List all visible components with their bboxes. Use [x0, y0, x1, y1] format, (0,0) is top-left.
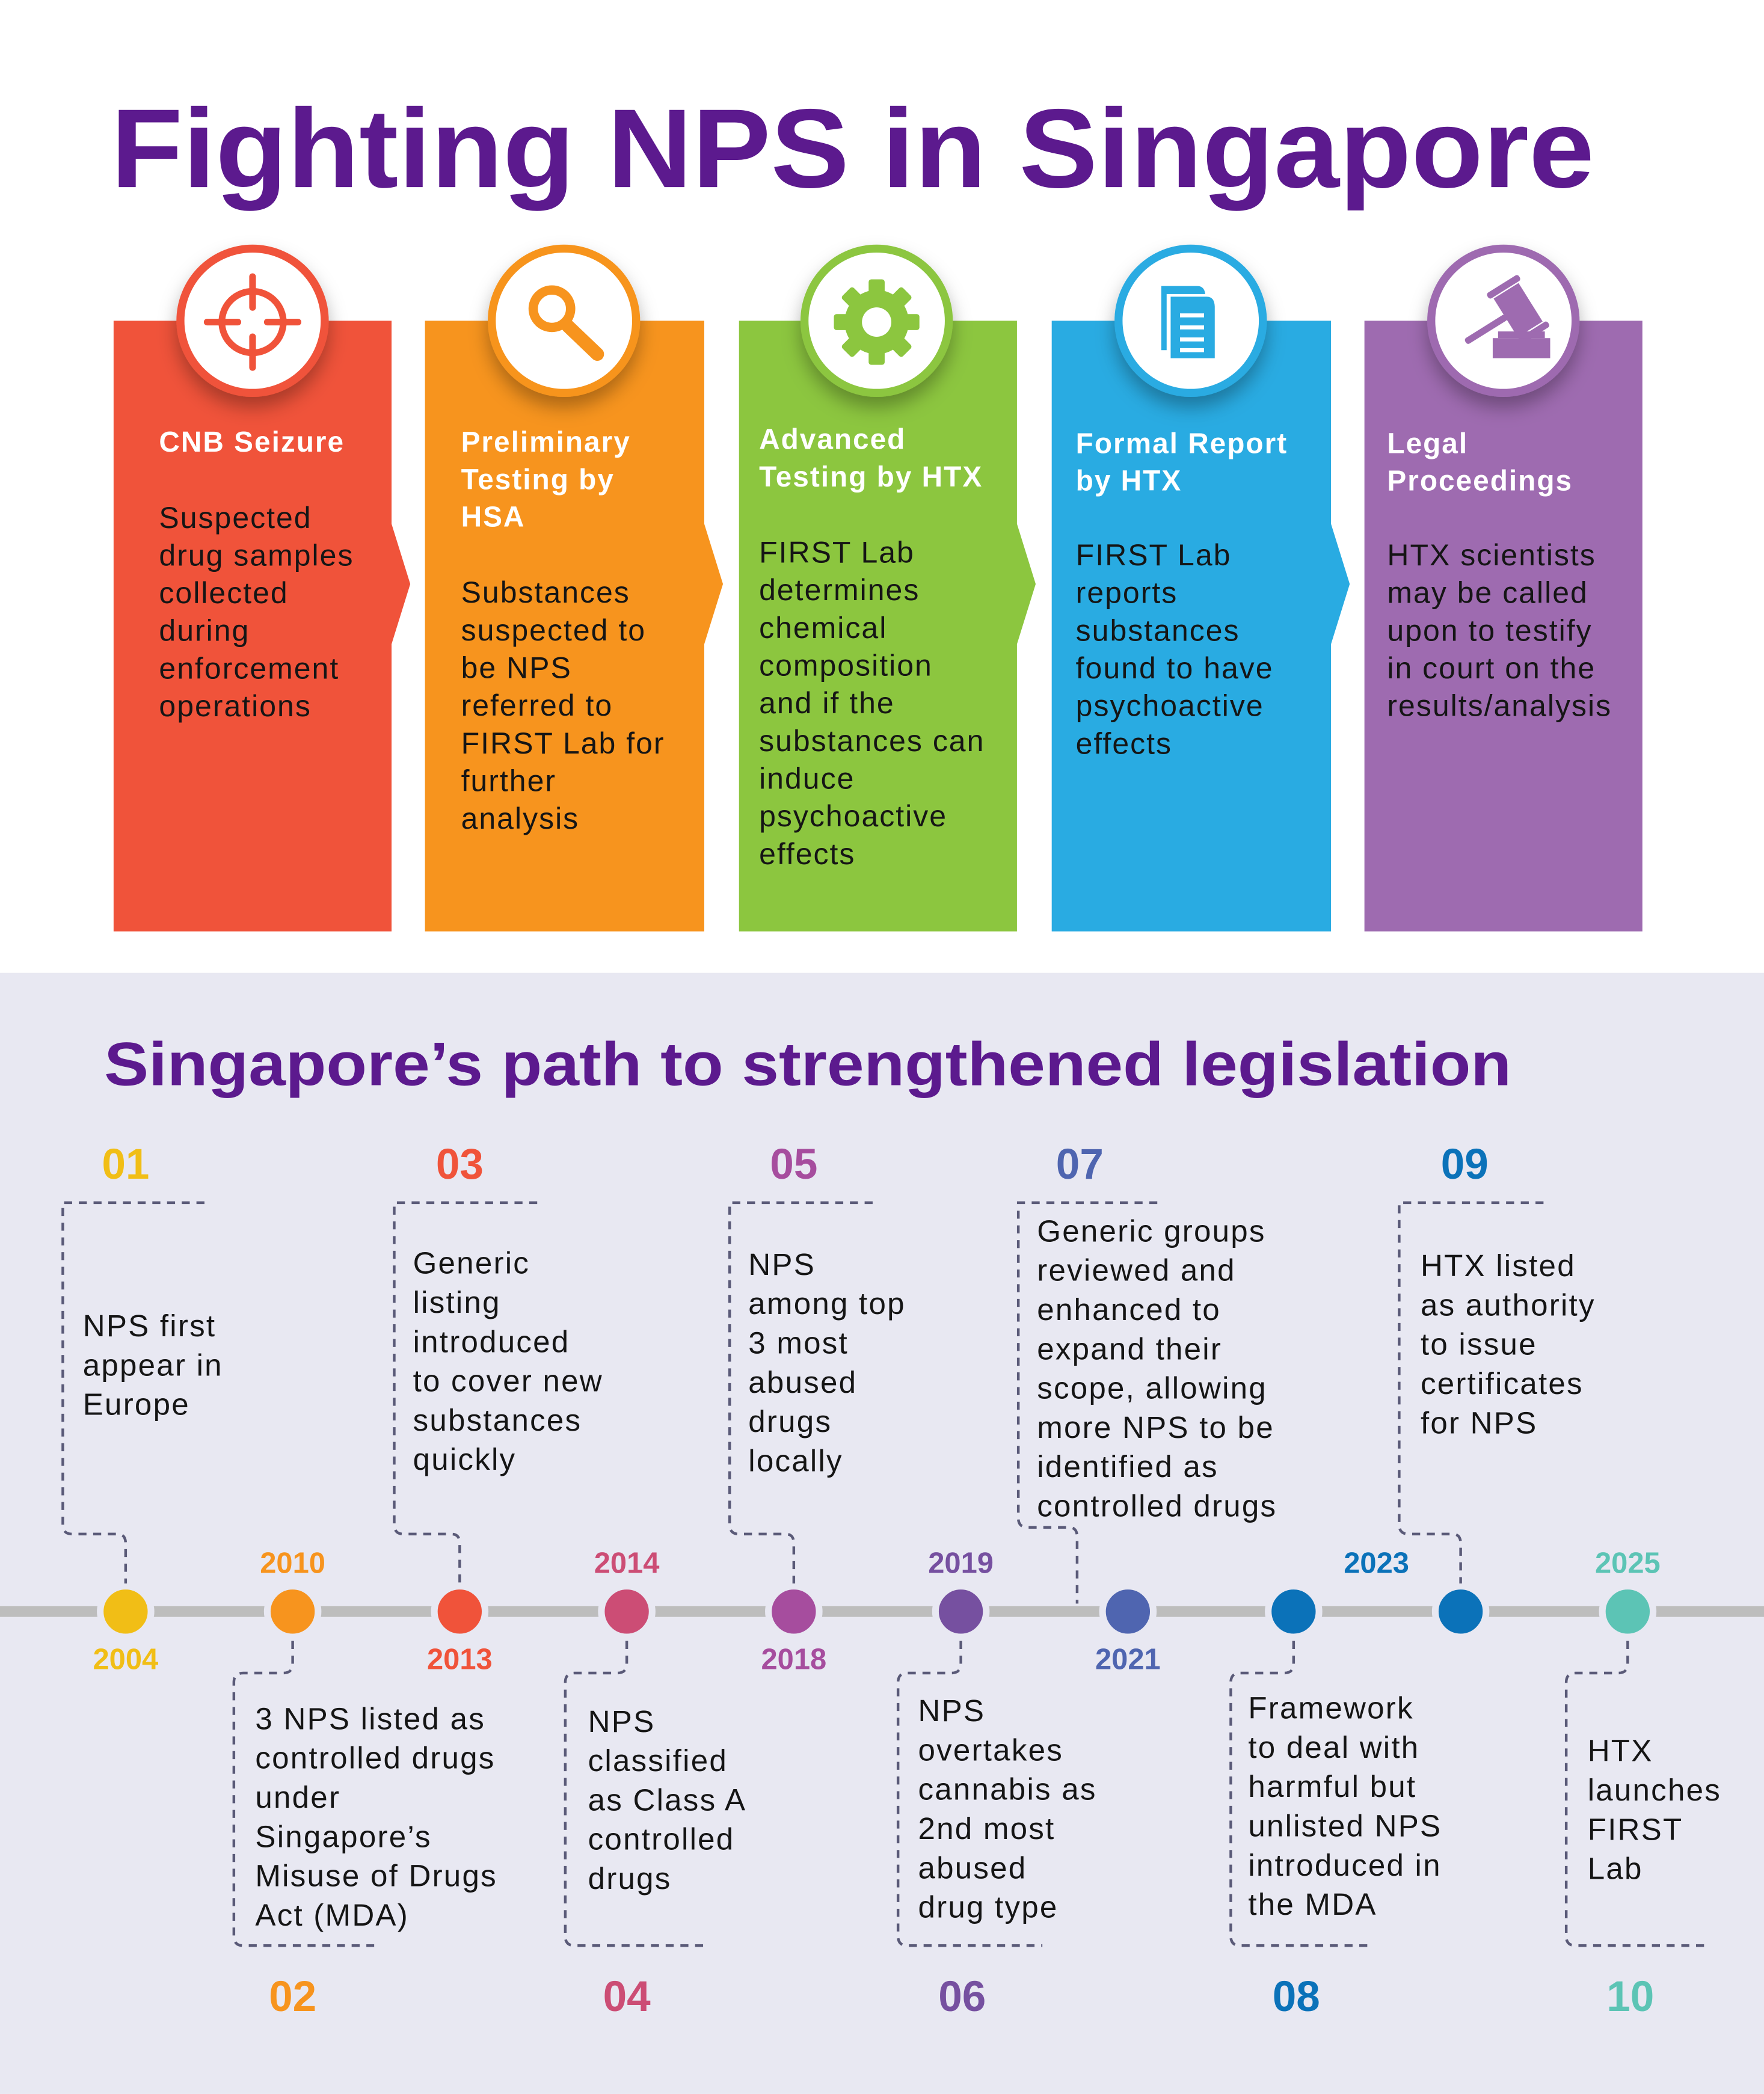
text: report body: FIRST Lab	[1076, 538, 1231, 572]
panel: Legal Proceedings: Legal	[1387, 428, 1468, 459]
text: event 07: enhanced to	[1037, 1292, 1221, 1327]
text: event 07: reviewed and	[1037, 1253, 1236, 1288]
text: event 03: quickly	[413, 1442, 516, 1476]
text: event 07: controlled drugs	[1037, 1489, 1277, 1523]
text: CNB body: enforcement	[159, 651, 339, 685]
text: report body: substances	[1076, 613, 1240, 647]
text: legal body: results/analysis	[1387, 689, 1612, 723]
text: event 09: for NPS	[1421, 1405, 1537, 1440]
icon: gavel	[1431, 248, 1576, 393]
panel: Formal Report	[1052, 248, 1350, 932]
text: event 03: substances	[413, 1403, 582, 1437]
text: event 06: drug type	[918, 1890, 1059, 1924]
text: event 10: launches	[1588, 1773, 1721, 1807]
text: CNB body: drug samples	[159, 538, 354, 572]
text: HTX advanced body: chemical	[759, 611, 887, 645]
text: event 09: certificates	[1421, 1366, 1584, 1401]
year labels: 2010	[260, 1547, 325, 1579]
numbers: 03	[436, 1141, 484, 1188]
text: event 05: 3 most	[748, 1325, 849, 1360]
text: HSA body: FIRST Lab for	[461, 726, 665, 760]
numbers: 09	[1441, 1141, 1489, 1188]
numbers: 04	[603, 1973, 651, 2021]
text: event 09: HTX listed	[1421, 1248, 1576, 1283]
text: event 05: drugs	[748, 1404, 832, 1438]
numbers: 08	[1273, 1973, 1320, 2021]
text: event 07: identified as	[1037, 1449, 1219, 1484]
text: event 06: abused	[918, 1850, 1027, 1885]
title: Fighting NPS in Singapore	[111, 85, 1594, 211]
text: event 09: as authority	[1421, 1288, 1596, 1322]
panel: CNB Seizure: CNB Seizure	[159, 426, 345, 458]
numbers: 06	[938, 1973, 986, 2021]
numbers	[102, 1141, 1654, 2021]
text: event 07: scope, allowing	[1037, 1371, 1267, 1405]
text: report body: found to have	[1076, 651, 1274, 685]
text: event 01: appear in	[83, 1348, 223, 1382]
panel: Preliminary Testing: HSA	[461, 502, 525, 533]
heading: timeline: Singapore’s path to strengthened legislation	[104, 1029, 1511, 1098]
panel: Preliminary Testing	[425, 248, 723, 932]
year labels: 2013	[427, 1643, 493, 1675]
year labels: 2021	[1095, 1643, 1161, 1675]
text: event 02: Act (MDA)	[255, 1898, 409, 1932]
text: report body: reports	[1076, 576, 1178, 610]
text: event 06: cannabis as	[918, 1772, 1097, 1807]
text: event 07: Generic groups	[1037, 1214, 1266, 1248]
text: event 08: introduced in	[1248, 1848, 1442, 1882]
numbers: 07	[1056, 1141, 1104, 1188]
text: HTX advanced body: and if the	[759, 686, 895, 720]
text: event 08: unlisted NPS	[1248, 1809, 1442, 1843]
text: HSA body: further	[461, 764, 556, 797]
text: event 04: controlled	[588, 1822, 734, 1856]
numbers: 10	[1606, 1973, 1654, 2021]
year labels	[93, 1547, 1661, 1675]
numbers: 05	[770, 1141, 817, 1188]
year labels: 2023	[1344, 1547, 1409, 1579]
text: legal body: in court on the	[1387, 651, 1596, 685]
year labels: 2019	[928, 1547, 994, 1579]
text: legal body: upon to testify	[1387, 613, 1593, 647]
text: HSA body: suspected to	[461, 613, 646, 647]
icon: magnifier	[492, 248, 636, 393]
panel: Advanced Testing: Advanced	[759, 424, 906, 456]
text: event 01: NPS first	[83, 1309, 216, 1343]
text: event 06: 2nd most	[918, 1811, 1055, 1846]
text: event 08: the MDA	[1248, 1887, 1377, 1921]
text: event 05: locally	[748, 1443, 843, 1478]
panel: CNB Seizure	[114, 248, 410, 932]
text: HTX advanced body: substances can	[759, 724, 985, 758]
numbers: 01	[102, 1141, 149, 1188]
text: event 04: NPS	[588, 1704, 655, 1739]
text: event 06: NPS	[918, 1693, 985, 1728]
text: event 04: as Class A	[588, 1782, 746, 1817]
panel: Legal Proceedings	[1365, 248, 1643, 932]
year labels: 2004	[93, 1643, 158, 1675]
panel: Formal Report: by HTX	[1076, 465, 1182, 497]
text: HSA body: analysis	[461, 802, 579, 835]
text: report body: effects	[1076, 726, 1172, 760]
text: event 09: to issue	[1421, 1327, 1537, 1362]
text: HSA body: Substances	[461, 576, 630, 609]
text: event 10: Lab	[1588, 1852, 1643, 1886]
year labels: 2014	[594, 1547, 659, 1579]
text: event 03: to cover new	[413, 1364, 603, 1398]
text: event 03: Generic	[413, 1246, 530, 1280]
year labels: 2025	[1595, 1547, 1661, 1579]
text: event 08: to deal with	[1248, 1730, 1419, 1764]
text: HTX advanced body: psychoactive	[759, 799, 947, 833]
icon: document	[1119, 248, 1263, 393]
text: event 01: Europe	[83, 1387, 190, 1422]
year labels: 2018	[761, 1643, 826, 1675]
text: CNB body: collected	[159, 576, 289, 610]
text: CNB body: Suspected	[159, 501, 312, 535]
text: event 10: HTX	[1588, 1734, 1653, 1768]
text: event 04: drugs	[588, 1861, 672, 1896]
panel: Advanced Testing: Testing by HTX	[759, 461, 983, 493]
text: event 05: among top	[748, 1286, 906, 1321]
panel: Preliminary Testing: Preliminary	[461, 426, 631, 458]
panel: Advanced Testing	[739, 248, 1036, 932]
text: HTX advanced body: composition	[759, 649, 933, 683]
text: legal body: may be called	[1387, 576, 1588, 610]
text: event 02: controlled drugs	[255, 1741, 496, 1775]
text: CNB body: operations	[159, 689, 312, 723]
text: HTX advanced body: effects	[759, 837, 855, 871]
text: HTX advanced body: determines	[759, 573, 920, 607]
panel: Formal Report: Formal Report	[1076, 428, 1288, 459]
text: HTX advanced body: induce	[759, 761, 855, 795]
panel: Preliminary Testing: Testing by	[461, 464, 615, 496]
text: event 07: more NPS to be	[1037, 1410, 1274, 1445]
text: event 04: classified	[588, 1743, 728, 1778]
text: event 08: harmful but	[1248, 1769, 1416, 1804]
text: HTX advanced body: FIRST Lab	[759, 536, 915, 570]
text: event 02: Singapore’s	[255, 1819, 432, 1853]
numbers: 02	[269, 1973, 316, 2021]
icon: crosshair	[180, 248, 325, 393]
text: event 05: NPS	[748, 1247, 816, 1282]
callout connectors	[63, 1203, 1709, 1945]
text: event 02: Misuse of Drugs	[255, 1859, 497, 1893]
text: event 05: abused	[748, 1365, 857, 1399]
icon: gear	[805, 248, 949, 393]
text: HSA body: be NPS	[461, 651, 572, 685]
text: HSA body: referred to	[461, 689, 613, 722]
text: legal body: HTX scientists	[1387, 538, 1596, 572]
text: event 03: introduced	[413, 1324, 570, 1359]
panel: timeline section	[0, 973, 1764, 2094]
text: event 10: FIRST	[1588, 1812, 1683, 1846]
text: event 02: 3 NPS listed as	[255, 1701, 485, 1736]
text: event 06: overtakes	[918, 1733, 1063, 1767]
timeline axis	[0, 1586, 1764, 1637]
text: event 02: under	[255, 1780, 340, 1814]
text: event 03: listing	[413, 1285, 501, 1319]
text: CNB body: during	[159, 614, 250, 648]
text: report body: psychoactive	[1076, 689, 1264, 723]
text: event 08: Framework	[1248, 1691, 1414, 1725]
text: event 07: expand their	[1037, 1331, 1222, 1366]
panel: Legal Proceedings: Proceedings	[1387, 465, 1573, 497]
